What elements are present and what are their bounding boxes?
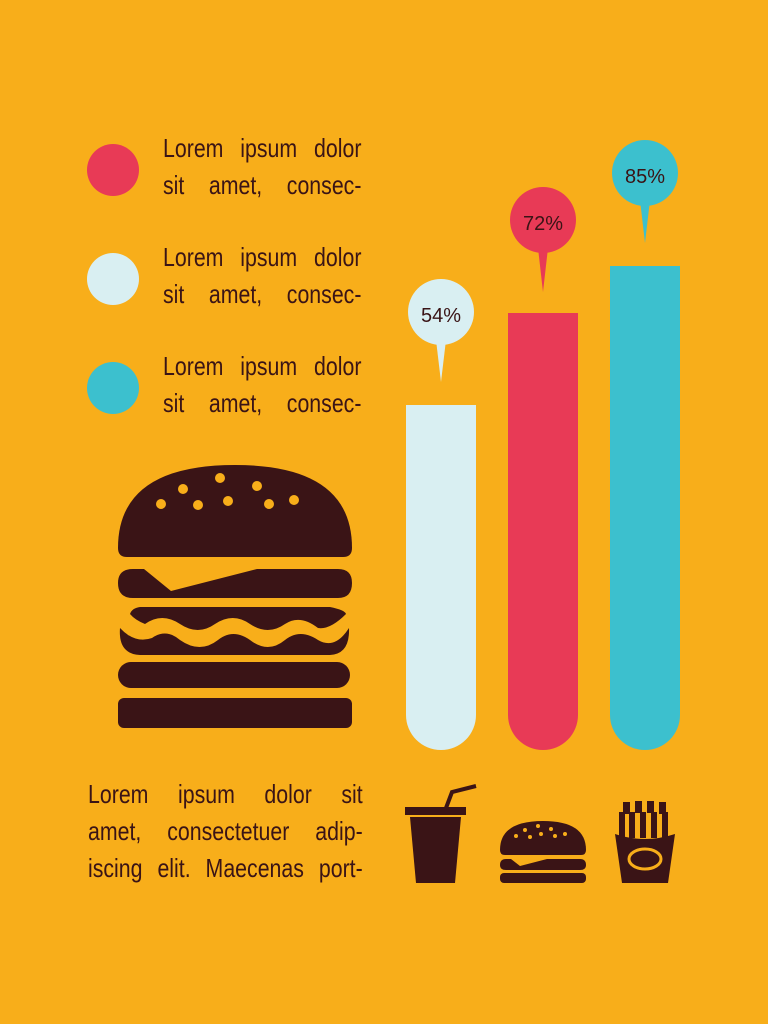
legend text 1: Lorem ipsum dolor (163, 133, 361, 163)
legend item 2 (87, 242, 362, 309)
legend item 3 (87, 351, 362, 418)
legend text 1: sit amet, consec- (163, 170, 361, 200)
legend text 1 (163, 133, 362, 200)
icon: drink cup (405, 786, 476, 883)
legend text 3: sit amet, consec- (163, 388, 361, 418)
icon: small burger (500, 821, 586, 883)
legend text 2 (163, 242, 362, 309)
legend item 1 (87, 133, 362, 200)
legend text 2: Lorem ipsum dolor (163, 242, 361, 272)
bar: 85% (610, 140, 680, 750)
bottom text block: amet, consectetuer adip- (88, 816, 363, 846)
bar: 72% (508, 187, 578, 750)
bottom text block (88, 779, 363, 883)
legend dot cyan (87, 362, 139, 414)
legend dot light (87, 253, 139, 305)
legend dot red (87, 144, 139, 196)
legend text 3: Lorem ipsum dolor (163, 351, 361, 381)
legend text 2: sit amet, consec- (163, 279, 361, 309)
bar: 72%: 72% (523, 213, 563, 235)
bottom text block: iscing elit. Maecenas port- (88, 853, 363, 883)
bar: 54%: 54% (421, 305, 461, 327)
bottom text block: Lorem ipsum dolor sit (88, 779, 363, 809)
icon: fries (615, 801, 675, 883)
legend text 3 (163, 351, 362, 418)
bar: 85%: 85% (625, 166, 665, 188)
bar: 54% (406, 279, 476, 750)
